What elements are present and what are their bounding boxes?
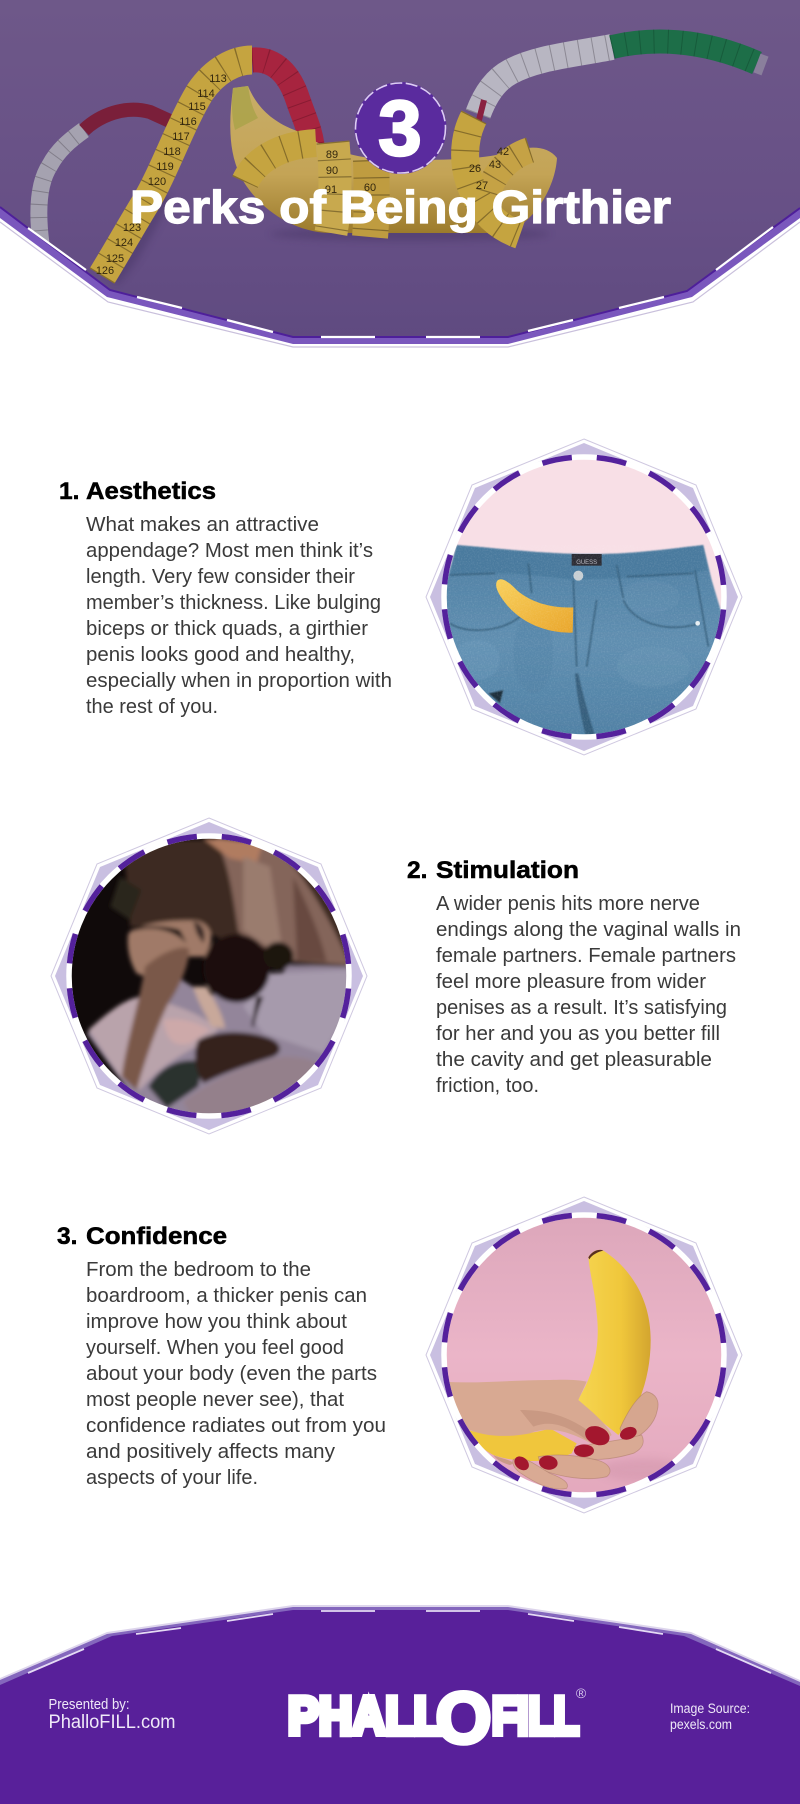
red tape behind banana [252, 60, 312, 145]
man's shirt [88, 997, 218, 1090]
woman's forearm [193, 987, 225, 1028]
body: Stimulation [436, 892, 741, 1097]
number badge [354, 82, 446, 174]
section 2 text: Stimulation [407, 857, 741, 1097]
pillow [183, 1057, 320, 1115]
body: Confidence: aspects of your life. [86, 1466, 258, 1489]
tape numbers: 117 [172, 131, 190, 143]
photo: jeans: GUESS [576, 560, 597, 566]
body: Aesthetics: biceps or thick quads, a girthier [86, 617, 368, 640]
logo: PhalloFILL: ® [576, 1685, 587, 1701]
tape numbers: 115 [188, 101, 206, 113]
photo: jeans [446, 460, 722, 734]
body: Confidence: about your body (even the parts [86, 1362, 377, 1385]
body: Confidence: and positively affects many [86, 1440, 336, 1463]
band dashes [28, 227, 773, 337]
panel: jeans and banana photo in octagon frame [426, 439, 742, 755]
body: Stimulation: A wider penis hits more nerve [436, 892, 700, 915]
photo: couple on bed [72, 838, 346, 1114]
footer purple fill [0, 1610, 800, 1804]
tape numbers: 125 [106, 253, 124, 265]
body: Confidence [86, 1258, 386, 1489]
tape numbers: 90 [326, 165, 338, 177]
header decorative outline [0, 222, 800, 347]
number badge: 3 [378, 84, 422, 172]
body: Stimulation: endings along the vaginal walls in [436, 918, 741, 941]
image source [670, 1701, 750, 1732]
left grey and dark red tape [39, 110, 172, 244]
section 3 text: Confidence [57, 1223, 386, 1489]
logo: PhalloFILL: O [435, 1679, 492, 1759]
tape numbers: 124 [115, 237, 133, 249]
logo: PhalloFILL: FILL [492, 1687, 579, 1746]
tape numbers: 114 [197, 88, 215, 100]
panel: footer [0, 1605, 800, 1804]
heading: Stimulation: Stimulation [436, 857, 579, 884]
right grey and green tape [478, 42, 765, 124]
tape numbers: 113 [209, 73, 227, 85]
lower banana [468, 1428, 577, 1461]
presented by [48, 1697, 176, 1733]
heading: Aesthetics: Aesthetics [86, 478, 216, 505]
body: Stimulation: penises as a result. It’s satisfying [436, 996, 727, 1019]
woman's torso [128, 921, 211, 987]
body: Aesthetics: the rest of you. [86, 695, 218, 718]
body: Aesthetics: appendage? Most men think it’s [86, 539, 373, 562]
logo: PhalloFILL: PHALL [288, 1687, 442, 1746]
body: Stimulation: the cavity and get pleasurable [436, 1048, 712, 1071]
body: Aesthetics: length. Very few consider their [86, 565, 355, 588]
tape numbers: 42 [497, 146, 509, 158]
body: Stimulation: friction, too. [436, 1074, 539, 1097]
body: Confidence: yourself. When you feel good [86, 1336, 344, 1359]
body: Aesthetics: What makes an attractive [86, 513, 319, 536]
photo: hand and banana [446, 1218, 722, 1492]
tape numbers: 116 [179, 116, 197, 128]
nails [514, 1426, 637, 1470]
fingers [513, 1392, 658, 1489]
tape numbers [96, 73, 509, 277]
image source: Image Source: [670, 1701, 750, 1716]
tape numbers: 26 [469, 163, 481, 175]
header purple band [0, 200, 800, 344]
tape numbers: 43 [489, 159, 501, 171]
tape numbers: 27 [476, 180, 488, 192]
body: Confidence: boardroom, a thicker penis can [86, 1284, 367, 1307]
tape numbers: 120 [148, 176, 166, 188]
body: Aesthetics: especially when in proportion with [86, 669, 392, 692]
bed sheet [87, 965, 352, 1117]
body: Aesthetics [86, 513, 392, 718]
tape numbers: 119 [156, 161, 174, 173]
image source: pexels.com [670, 1717, 732, 1732]
woman's hair [203, 934, 270, 1002]
band inner dark line [0, 207, 800, 337]
woman's arm [122, 947, 189, 1090]
dashed ring [69, 836, 349, 1116]
man's jeans [148, 1060, 203, 1108]
banana [230, 86, 557, 233]
body: Aesthetics: penis looks good and healthy, [86, 643, 355, 666]
tape numbers: 123 [123, 222, 141, 234]
body: Stimulation: for her and you as you better fill [436, 1022, 720, 1045]
heading: Stimulation: 2. [407, 857, 427, 884]
tape numbers: 118 [163, 146, 181, 158]
dashed ring [444, 1215, 724, 1495]
tape numbers: 91 [325, 184, 337, 196]
upright banana [577, 1250, 651, 1435]
panel: hand holding banana photo in octagon frame [426, 1197, 742, 1513]
presented by: Presented by: [48, 1697, 130, 1713]
panel: header banner [0, 0, 800, 347]
body: Stimulation: feel more pleasure from wider [436, 970, 706, 993]
tape numbers: 89 [326, 149, 338, 161]
title: Perks of Being Girthier [130, 181, 671, 233]
banana in pocket [496, 579, 573, 633]
section 1 text: Aesthetics [59, 478, 392, 718]
panel: bedroom photo in octagon frame [51, 818, 367, 1134]
logo: PhalloFILL [288, 1679, 587, 1759]
header photo: banana wrapped in measuring tape [0, 0, 800, 345]
body: Confidence: From the bedroom to the [86, 1258, 311, 1281]
heading: Confidence: 3. [57, 1223, 77, 1250]
body: Confidence: confidence radiates out from you [86, 1414, 386, 1437]
heading: Aesthetics: 1. [59, 478, 79, 505]
body: Confidence: improve how you think about [86, 1310, 347, 1333]
body: Stimulation: female partners. Female partners [436, 944, 736, 967]
body: Aesthetics: member’s thickness. Like bulging [86, 591, 381, 614]
heading: Confidence: Confidence [86, 1223, 227, 1250]
body: Confidence: most people never see), that [86, 1388, 344, 1411]
tape numbers: 60 [364, 182, 376, 194]
tape numbers: 126 [96, 265, 114, 277]
presented by: PhalloFILL.com [48, 1712, 176, 1733]
yellow tape wraps [102, 60, 530, 276]
hand back [443, 1380, 612, 1447]
man's hair [195, 1032, 280, 1083]
dashed ring [444, 457, 724, 737]
